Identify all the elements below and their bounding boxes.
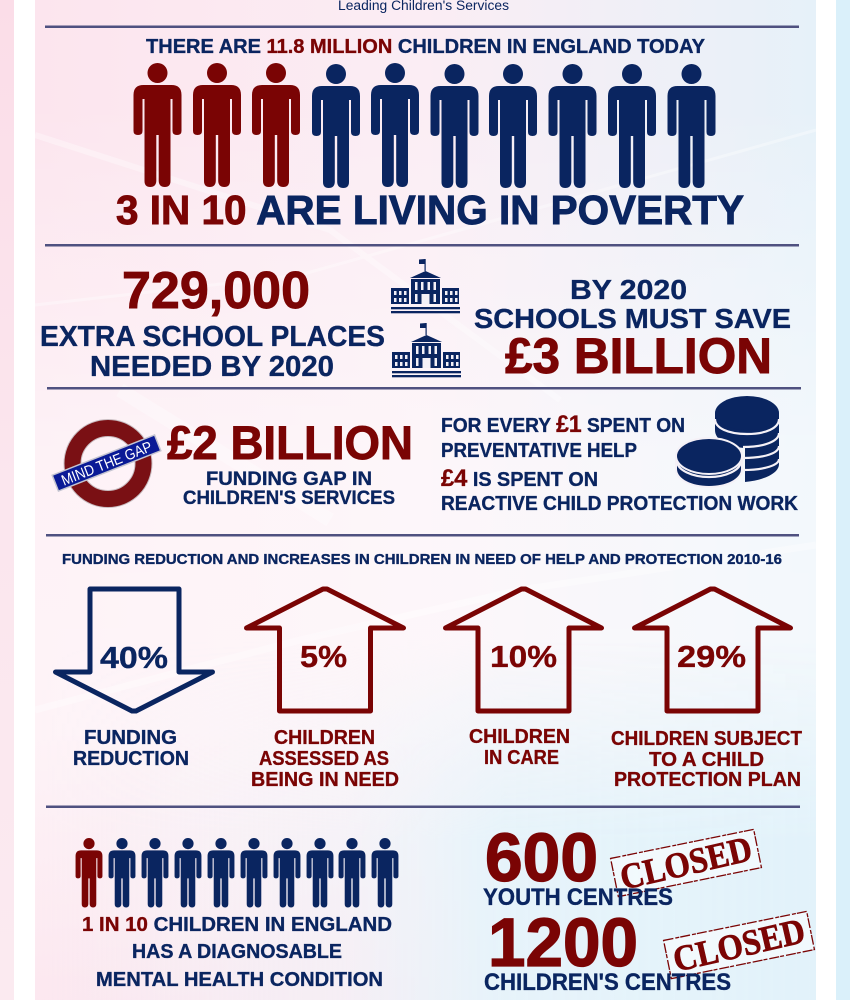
pictogram: 1 in 10 children: [76, 838, 398, 907]
text: diagnosable condition: [82, 914, 392, 991]
panel: funding gap: [52, 396, 799, 515]
text: extra school places: [40, 321, 385, 383]
arrow: 40% funding reduction: REDUCTION: [73, 748, 189, 770]
text: funding gap: FUNDING GAP IN: [206, 468, 372, 490]
heading: funding reduction: FUNDING REDUCTION AND INCREASES IN CHILDREN IN NEED OF HELP AND PROTECTION 2010-16: [62, 552, 782, 568]
pictogram: 3 in 10 children: [134, 63, 716, 188]
text: funding gap: [183, 468, 395, 509]
text: preventative vs reactive spend: REACTIVE CHILD PROTECTION WORK: [441, 493, 799, 515]
arrow: 10% in care: CHILDREN: [469, 726, 570, 748]
text: extra school places: NEEDED BY 2020: [90, 351, 334, 383]
arrow: 29% child protection plan: TO A CHILD: [649, 749, 764, 771]
heading: 11.8 million children: THERE ARE 11.8 MILLION CHILDREN IN ENGLAND TODAY: [146, 36, 706, 58]
headline: 3 in 10 living in poverty: 3 IN 10 ARE LIVING IN POVERTY: [116, 187, 744, 233]
section dividers: [45, 26, 801, 808]
text: preventative vs reactive spend: [441, 411, 799, 515]
panel: closed centres: [483, 819, 815, 996]
arrow: 10% in care: 10%: [490, 639, 557, 674]
arrow: 29% child protection plan: PROTECTION PLAN: [614, 769, 801, 791]
text: schools must save: BY 2020: [570, 274, 687, 305]
panel: funding reduction and increases: [56, 552, 802, 791]
stat: 1200 children's centres: CHILDREN'S CENTRES: [484, 969, 731, 996]
text: preventative vs reactive spend: £4 IS SPENT ON: [441, 465, 598, 492]
arrow: 5% assessed as in need: BEING IN NEED: [251, 769, 399, 791]
arrow: 5% assessed as in need: 5%: [300, 639, 347, 674]
arrow: 40% funding reduction: [56, 589, 212, 770]
text: preventative vs reactive spend: FOR EVERY £1 SPENT ON: [441, 411, 685, 438]
icon: mind the gap roundel: MIND THE GAP: [59, 438, 155, 489]
icon: schools: [391, 259, 461, 377]
arrow: 29% child protection plan: CHILDREN SUBJECT: [611, 728, 802, 750]
text: schools must save: SCHOOLS MUST SAVE: [474, 303, 791, 334]
stamp: closed youth centres: CLOSED: [616, 828, 756, 898]
text: diagnosable condition: MENTAL HEALTH CONDITION: [96, 969, 383, 991]
text: preventative vs reactive spend: PREVENTATIVE HELP: [441, 440, 637, 462]
arrow: 10% in care: [446, 589, 602, 769]
arrow: 29% child protection plan: 29%: [677, 639, 746, 674]
text: funding gap: CHILDREN'S SERVICES: [183, 487, 395, 509]
right page strip: [836, 0, 850, 1000]
panel: mental health: [76, 838, 398, 991]
stat: 3 billion: £3 BILLION: [505, 328, 772, 384]
panel: children in poverty: [116, 36, 744, 233]
panel: school places and savings: [40, 259, 791, 384]
left page strip: [0, 0, 14, 1000]
arrow: 40% funding reduction: 40%: [100, 640, 168, 675]
arrow: 5% assessed as in need: ASSESSED AS: [259, 748, 389, 770]
text: diagnosable condition: HAS A DIAGNOSABLE: [132, 941, 342, 963]
stat: 729,000: 729,000: [122, 262, 310, 320]
arrow: 40% funding reduction: FUNDING: [84, 727, 177, 749]
arrow: 5% assessed as in need: [246, 589, 404, 791]
icon: coin stacks: [677, 396, 779, 486]
text: extra school places: EXTRA SCHOOL PLACES: [40, 321, 385, 353]
arrow: 5% assessed as in need: CHILDREN: [274, 727, 375, 749]
text: diagnosable condition: 1 IN 10 CHILDREN IN ENGLAND: [82, 914, 392, 936]
stat: 2 billion: £2 BILLION: [167, 416, 413, 469]
stat: 1200 children's centres: [484, 904, 731, 996]
stat: 600 youth centres: [483, 819, 673, 911]
stat: 600 youth centres: YOUTH CENTRES: [483, 884, 673, 911]
stamp: closed children's centres: CLOSED: [669, 910, 809, 980]
arrow: 10% in care: IN CARE: [484, 747, 559, 769]
stat: 1200 children's centres: 1200: [488, 904, 638, 981]
stat: 600 youth centres: 600: [485, 819, 598, 896]
text: schools must save: [474, 274, 791, 334]
arrow: 29% child protection plan: [611, 589, 802, 791]
